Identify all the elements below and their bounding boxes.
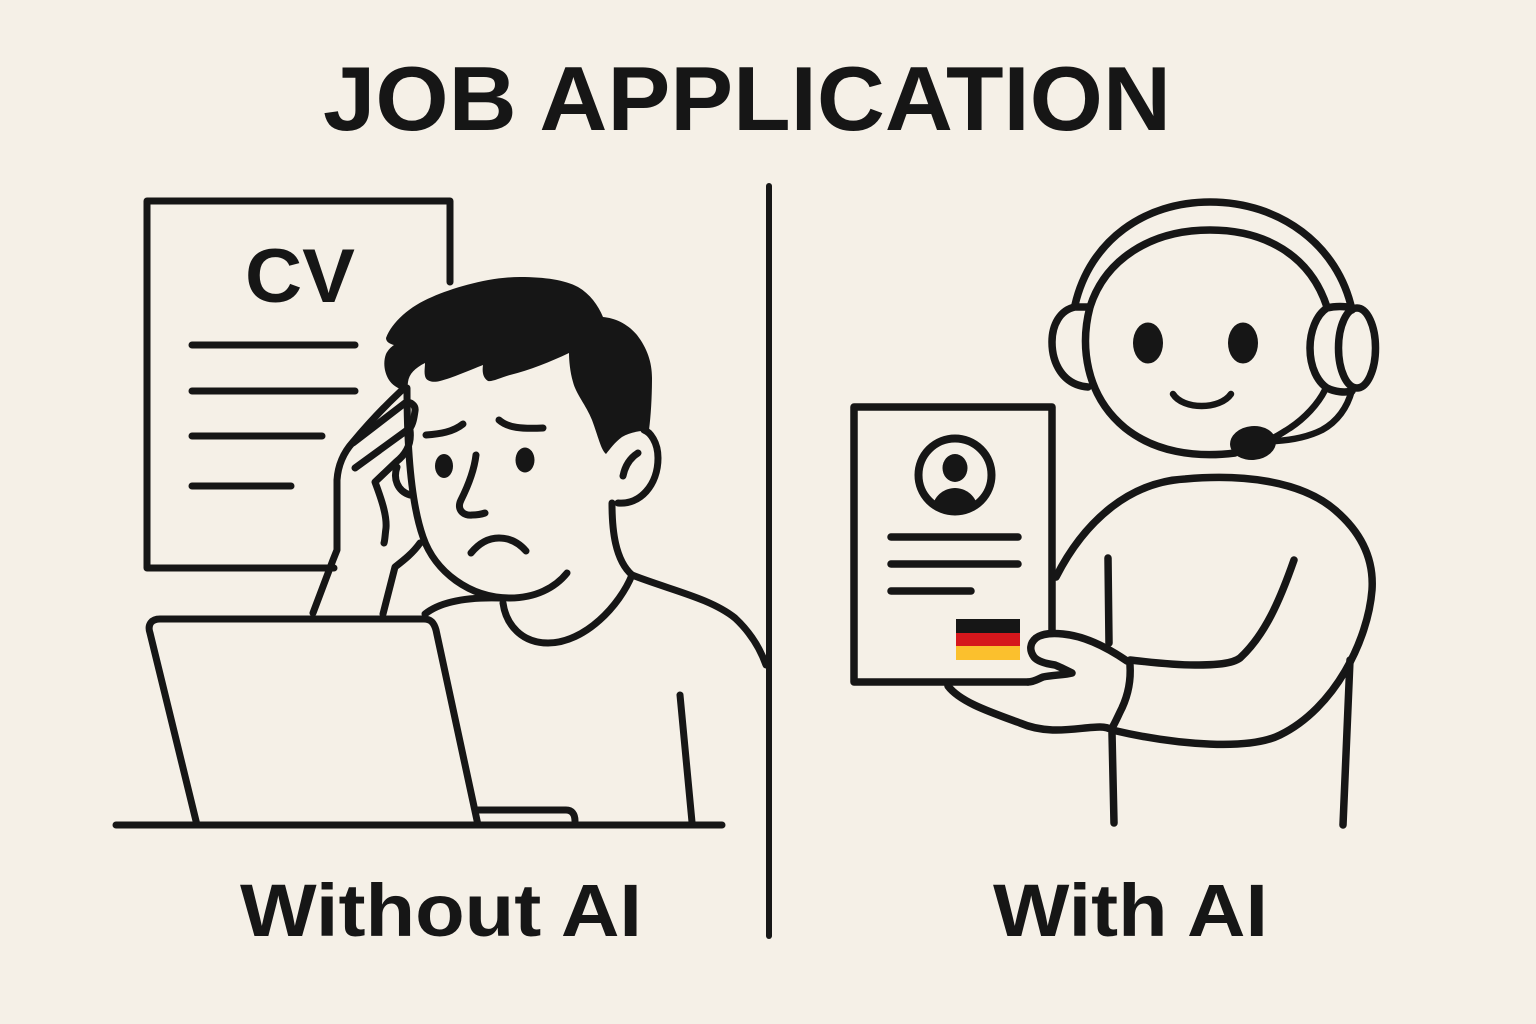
right ear cup xyxy=(1310,306,1352,392)
CV document xyxy=(147,201,450,568)
CV document: CV xyxy=(245,234,355,319)
eyes and smile xyxy=(1133,322,1163,364)
hand holding document xyxy=(948,633,1130,730)
ear xyxy=(618,430,658,503)
panel: without AI xyxy=(116,201,766,825)
resume document xyxy=(854,407,1052,682)
eyebrows and eyes xyxy=(426,424,463,435)
desk xyxy=(116,822,722,828)
hand and arm xyxy=(313,391,401,613)
left ear cup xyxy=(1052,307,1090,387)
mouth xyxy=(471,538,526,553)
hair xyxy=(384,277,652,454)
label: without AI: Without AI xyxy=(240,869,642,952)
label: with AI: With AI xyxy=(993,869,1268,952)
center divider xyxy=(766,186,772,936)
panel: with AI xyxy=(854,202,1376,825)
robot assistant xyxy=(1052,202,1376,825)
shoulder and neck xyxy=(425,598,500,614)
head xyxy=(1086,230,1327,455)
worried man xyxy=(313,277,766,822)
body xyxy=(1056,477,1372,744)
title: JOB APPLICATION xyxy=(323,49,1171,150)
German flag xyxy=(956,619,1020,660)
face outline xyxy=(407,388,567,598)
headband xyxy=(1075,202,1352,310)
nose xyxy=(459,455,485,515)
microphone xyxy=(1273,390,1325,438)
laptop xyxy=(149,619,575,825)
